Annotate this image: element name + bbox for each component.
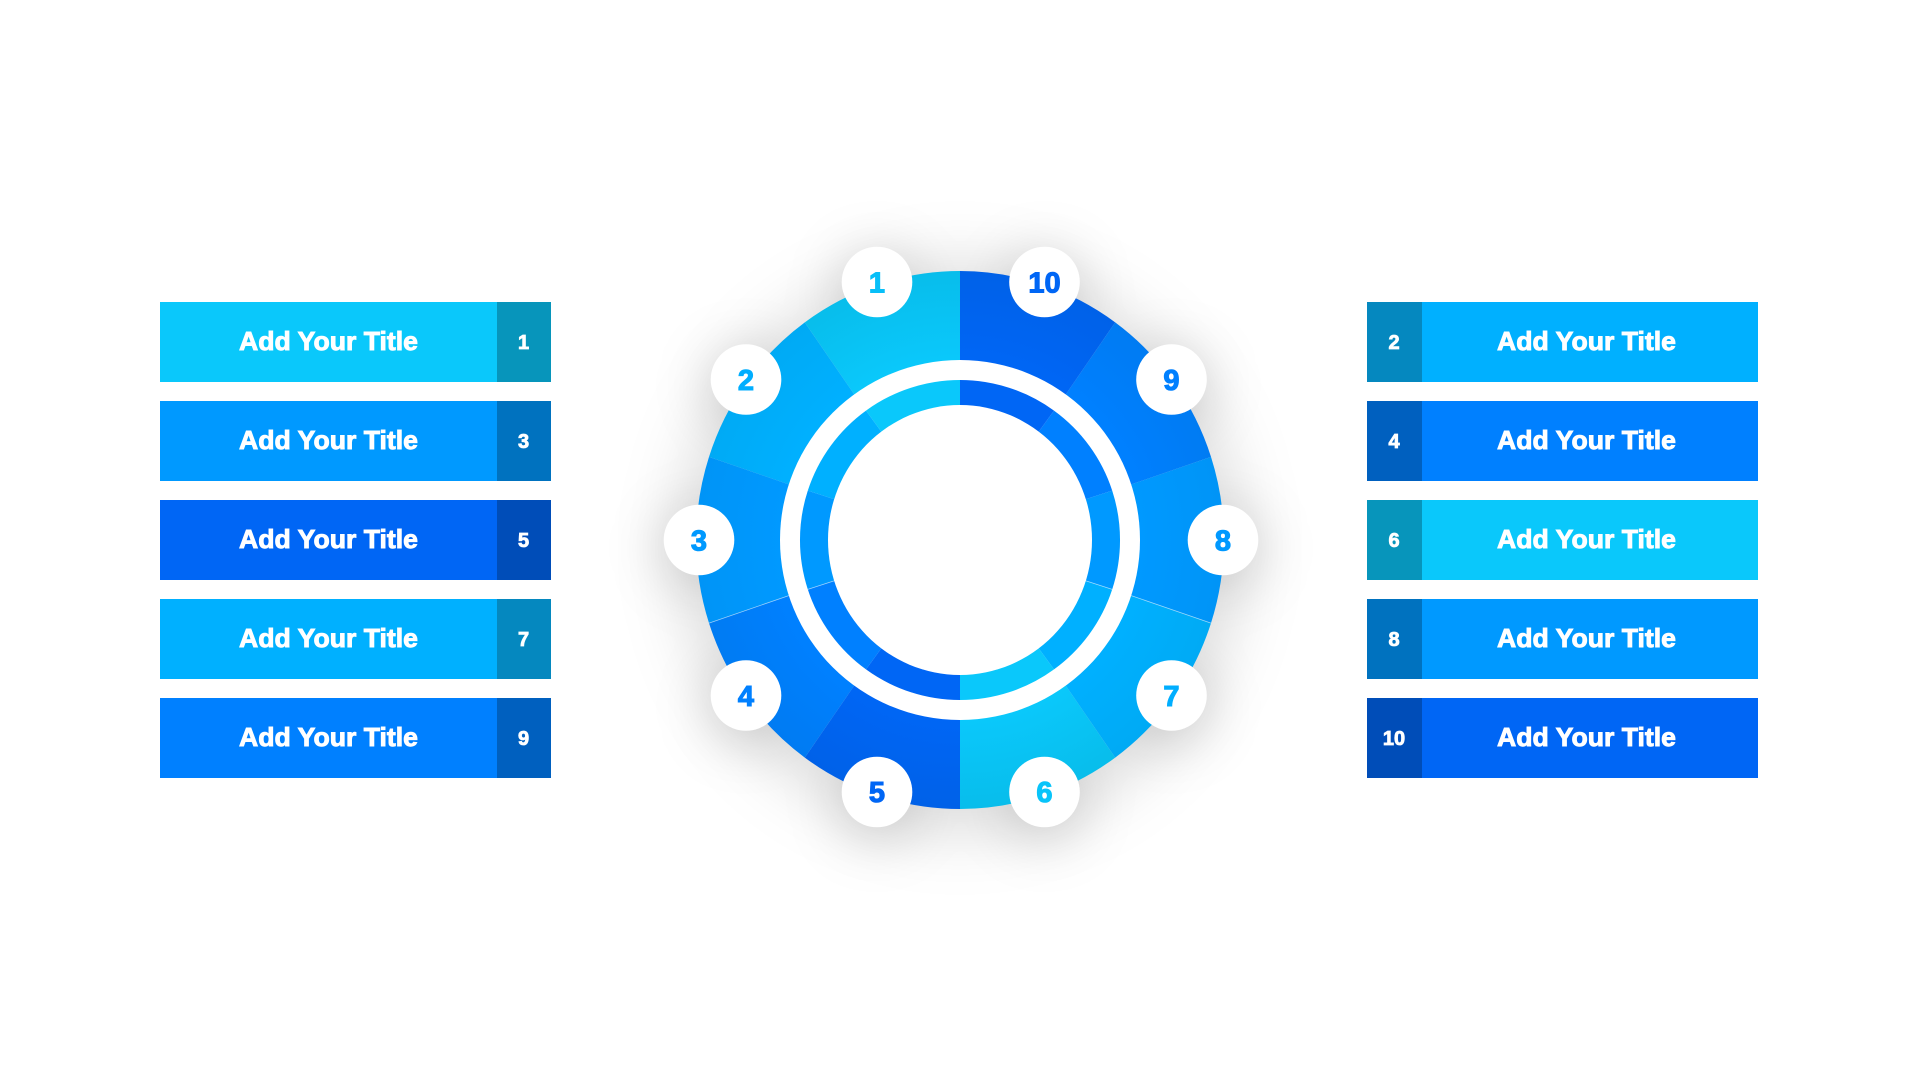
left list of titles [160,302,551,778]
central white circle [828,405,1092,675]
white gap ring [780,360,1140,720]
right bar 6 [1367,500,1758,580]
badge 10: 10 [1028,268,1061,300]
left bar 1: Add Your Title [239,326,418,356]
badge 10 [1009,247,1080,317]
left bar 5: 5 [518,530,529,552]
badge 8 [1188,505,1258,575]
badge 6: 6 [1036,777,1053,809]
badge 3 [664,505,734,575]
right bar 4 [1367,401,1758,481]
left bar 3 [160,401,551,481]
left bar 3: 3 [518,431,529,453]
badge 1: 1 [869,268,885,300]
badge 9: 9 [1163,365,1180,397]
right bar 10 [1367,698,1758,778]
outer ring of ten segments [696,271,1224,809]
badge 1 [842,247,912,317]
numbered badges around the wheel [664,247,1258,827]
badge 9 [1136,344,1207,415]
left bar 5: Add Your Title [239,524,418,554]
badge 2: 2 [738,365,754,397]
right bar 8: Add Your Title [1497,623,1676,653]
badge 7 [1136,660,1207,731]
badge 7: 7 [1163,681,1180,713]
right bar 10: Add Your Title [1497,722,1676,752]
badge 5: 5 [869,777,885,809]
right bar 8: 8 [1388,629,1400,651]
left bar 7: 7 [518,629,529,651]
right bar 6: Add Your Title [1497,524,1676,554]
right bar 2: 2 [1388,332,1400,354]
right list of titles [1367,302,1758,778]
soft shadows behind the badges [657,248,1265,845]
right bar 2: Add Your Title [1497,326,1676,356]
inner ring of ten segments [800,380,1120,700]
left bar 7 [160,599,551,679]
left bar 9 [160,698,551,778]
right bar 4: 4 [1388,431,1400,453]
badge 6 [1009,757,1080,827]
right bar 10: 10 [1383,728,1405,750]
left bar 1 [160,302,551,382]
badge 4 [711,660,781,731]
left bar 9: 9 [518,728,529,750]
right bar 6: 6 [1388,530,1400,552]
right bar 8 [1367,599,1758,679]
left bar 9: Add Your Title [239,722,418,752]
left bar 1: 1 [518,332,529,354]
right bar 2 [1367,302,1758,382]
broad soft shadow behind the wheel [680,263,1240,833]
badge 4: 4 [738,681,754,713]
badge 3: 3 [691,526,707,558]
badge 8: 8 [1215,526,1231,558]
left bar 3: Add Your Title [239,425,418,455]
left bar 7: Add Your Title [239,623,418,653]
left bar 5 [160,500,551,580]
badge 5 [842,757,912,827]
badge 2 [711,344,781,415]
right bar 4: Add Your Title [1497,425,1676,455]
